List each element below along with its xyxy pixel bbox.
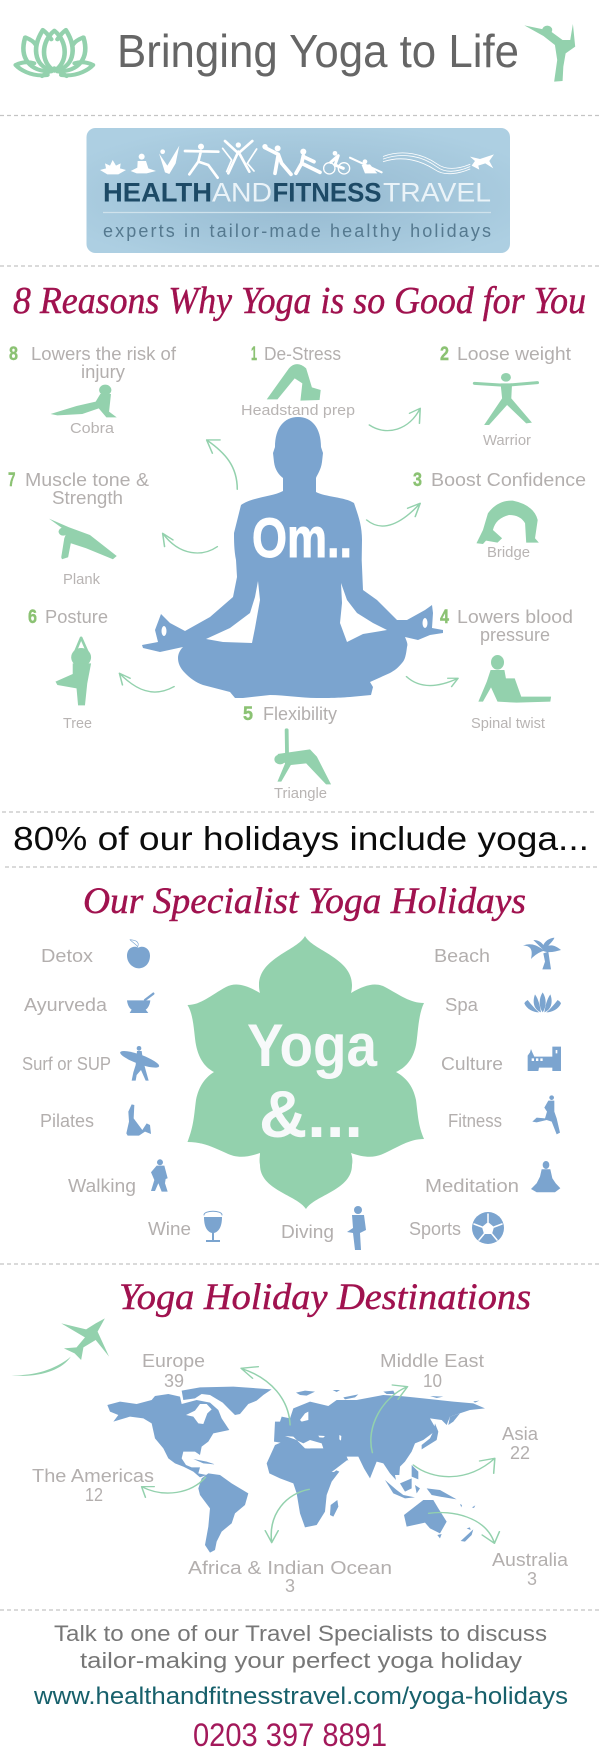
item: meditation: Meditation [425,1176,519,1196]
world map [107,1387,485,1553]
reason 5: 5 [243,704,253,725]
reason 4: pressure [480,625,550,645]
reason 5 [243,704,337,802]
logo wordmark: TRAVEL [383,178,491,208]
flower badge: Yoga [247,1012,378,1079]
item: spa: Spa [445,995,479,1015]
reason 1: De-Stress [264,344,341,364]
reason 5: Flexibility [263,704,337,724]
logo wordmark [103,178,491,208]
label: Australia: 3 [527,1569,537,1589]
label: Africa and Indian Ocean [188,1558,392,1596]
label: Asia: Asia [502,1424,539,1444]
reason 2: Loose weight [457,344,571,364]
logo wordmark: HEALTH [103,178,212,208]
logo wordmark: AND [212,178,272,208]
label: Europe: 39 [164,1371,184,1391]
reason 5: Triangle [274,785,327,802]
item: beach [434,938,561,969]
label: Middle East: Middle East [380,1351,484,1371]
reason 2: 2 [440,344,449,365]
reason 4: 4 [440,607,449,628]
label: Australia: Australia [492,1550,569,1570]
reason 8: Cobra [70,420,115,437]
reason 1 [241,344,355,419]
panel: company logo [86,128,510,253]
label: Europe: Europe [142,1351,205,1371]
destination arrows [142,1367,499,1543]
item: walking: Walking [68,1176,136,1196]
item: sports: Sports [409,1219,461,1239]
icon: plane with swoosh [11,1318,109,1376]
reason 7: Muscle tone & [25,470,149,490]
reason 2: Warrior [483,432,531,449]
heading: specialist holidays: Our Specialist Yoga Holidays [83,881,526,922]
reason 4: Lowers blood [457,607,573,627]
item: wine: Wine [148,1219,191,1239]
item: culture: Culture [441,1054,503,1074]
label: Middle East [380,1351,484,1391]
reason 8: 8 [9,344,18,365]
item: surf: Surf or SUP [22,1054,111,1074]
item: detox [41,940,150,968]
label: Africa and Indian Ocean: 3 [285,1576,295,1596]
reason 6: 6 [28,607,37,628]
arrows between reasons [119,408,458,692]
reason 1: 1 [251,344,257,365]
label: Asia: 22 [510,1443,530,1463]
item: diving: Diving [281,1222,334,1242]
reason 8: Lowers the risk of [31,344,177,364]
reason 7 [8,470,149,588]
meditating figure [142,417,443,698]
item: pilates [40,1104,151,1136]
title: Bringing Yoga to Life [117,25,519,77]
item: spa [445,992,561,1015]
reason 4 [440,607,573,732]
reason 8: injury [81,362,125,382]
website: www.healthandfitnesstravel.com/yoga-holidays [33,1683,568,1710]
item: surf [22,1046,161,1081]
logo tagline: experts in tailor-made healthy holidays [103,221,491,241]
logo wordmark: FITNESS [272,178,382,208]
callout: 80 percent: 80% of our holidays include yoga... [13,820,589,857]
panel: header [16,24,575,82]
reason 7: 7 [8,470,16,491]
call to action [54,1621,547,1673]
item: sports [409,1212,504,1244]
item: culture [441,1047,561,1074]
phone: 0203 397 8891 [193,1717,387,1753]
item: fitness [448,1095,560,1134]
reason 3: 3 [413,470,422,491]
item: walking [68,1159,168,1196]
label: The Americas [32,1466,154,1505]
figure inner gaps [206,581,260,643]
flower badge: &... [259,1077,363,1151]
label: The Americas: 12 [85,1485,103,1505]
panel: specialist holidays [22,936,561,1250]
item: diving [281,1206,366,1250]
panel: contact footer [33,1621,568,1753]
item: wine [148,1211,222,1242]
reason 7: Plank [63,571,100,588]
label: The Americas: The Americas [32,1466,154,1486]
label: Middle East: 10 [423,1371,442,1391]
icon: dancer pose [524,24,575,82]
label: Europe [142,1351,205,1391]
reason 4: Spinal twist [471,715,546,732]
reason 7: Strength [52,488,123,508]
item: ayurveda: Ayurveda [24,995,108,1015]
item: meditation [425,1161,560,1196]
item: pilates: Pilates [40,1111,94,1131]
label: Australia [492,1550,569,1589]
item: ayurveda [24,994,153,1015]
heading: destinations: Yoga Holiday Destinations [119,1277,531,1318]
reason 6: Tree [63,715,92,732]
Om text: Om.. [252,506,352,569]
item: fitness: Fitness [448,1111,502,1131]
reason 3 [413,470,586,561]
call to action: tailor-making your perfect yoga holiday [80,1648,522,1673]
icon: lotus [16,30,93,76]
logo activity icons [100,141,494,178]
label: Asia [502,1424,539,1463]
reason 3: Boost Confidence [431,470,586,490]
call to action: Talk to one of our Travel Specialists to discuss [54,1621,547,1646]
reason 3: Bridge [487,544,530,561]
reason 6: Posture [45,607,108,627]
label: Africa and Indian Ocean: Africa & Indian Ocean [188,1558,392,1578]
reason 2 [440,344,571,449]
panel: destinations [11,1318,569,1596]
flower badge [188,936,424,1209]
reason 1: Headstand prep [241,402,355,419]
item: detox: Detox [41,946,93,966]
panel: reasons diagram [8,344,586,802]
reason 8 [9,344,177,437]
item: beach: Beach [434,946,490,966]
reason 6 [28,607,108,732]
